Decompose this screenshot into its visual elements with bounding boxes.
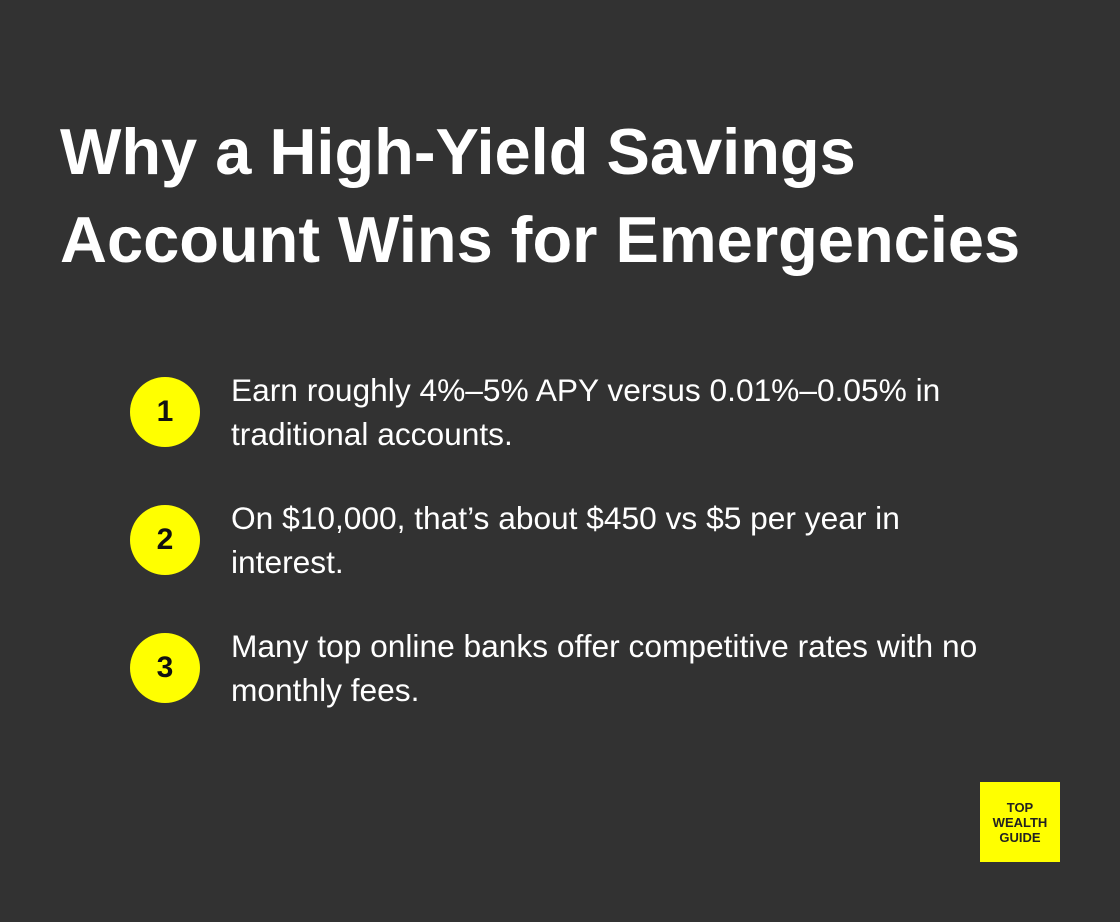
badge 3: 3	[157, 651, 173, 684]
logo: WEALTH	[993, 814, 1047, 830]
text 1: Earn roughly 4%–5% APY versus 0.01%–0.05% in	[231, 372, 940, 408]
text 2: interest.	[231, 544, 344, 580]
text 3: monthly fees.	[231, 672, 419, 708]
badge 2	[130, 505, 200, 575]
logo: TOP	[1007, 800, 1033, 814]
text 1	[231, 372, 940, 452]
text 3	[231, 628, 977, 708]
item 1	[130, 372, 940, 452]
title: Why a High-Yield Savings	[60, 115, 856, 188]
item 3	[130, 628, 977, 708]
title: Account Wins for Emergencies	[60, 203, 1020, 276]
logo	[980, 782, 1060, 862]
badge 3	[130, 633, 200, 703]
logo: GUIDE	[999, 830, 1041, 844]
text 2: On $10,000, that’s about $450 vs $5 per year in	[231, 500, 900, 536]
badge 2: 2	[157, 523, 173, 556]
item 2	[130, 500, 900, 580]
badge 1: 1	[157, 395, 173, 428]
badge 1	[130, 377, 200, 447]
text 3: Many top online banks offer competitive rates with no	[231, 628, 977, 664]
title	[60, 115, 1020, 276]
text 2	[231, 500, 900, 580]
text 1: traditional accounts.	[231, 416, 513, 452]
